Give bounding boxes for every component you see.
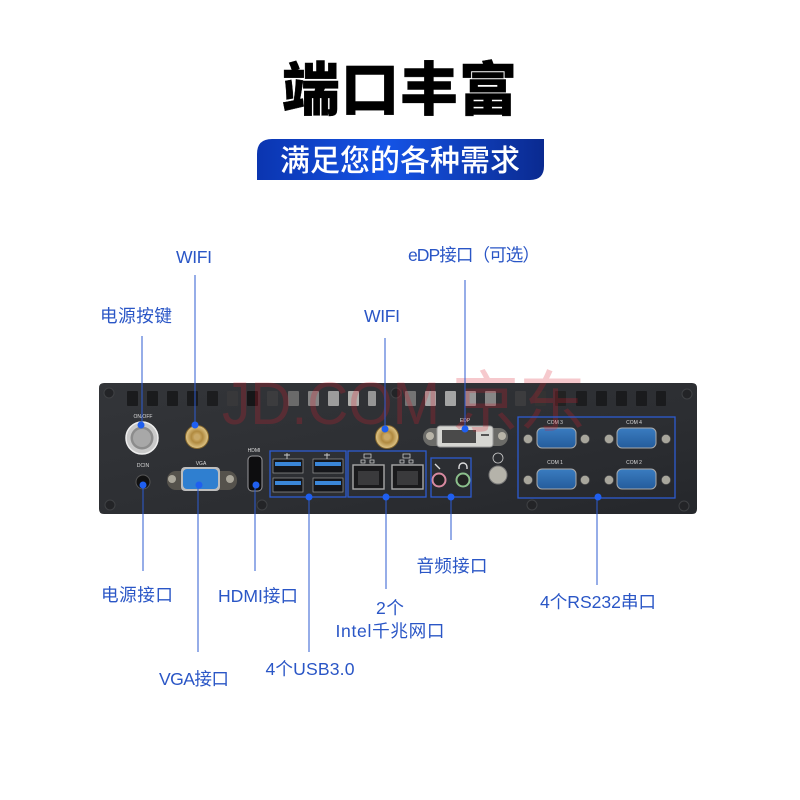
COM ports: [524, 420, 670, 489]
COM ports: COM 4: [626, 420, 642, 426]
callout: power jack: [101, 482, 173, 605]
callout: WIFI 1: WIFI: [176, 247, 212, 267]
callout: audio: 音频接口: [416, 556, 488, 576]
WIFI antenna connector 1: [186, 426, 208, 448]
HDMI port: HDMI: [248, 448, 260, 454]
callout: Ethernet: Intel千兆网口: [336, 621, 444, 641]
callout: HDMI: HDMI接口: [218, 586, 298, 606]
DC input jack: DCIN: [137, 463, 149, 469]
watermark: 京东: [452, 366, 586, 441]
callout: power button: [100, 306, 172, 428]
watermark: JD.COM: [222, 370, 440, 437]
callout: Ethernet: 2个: [376, 598, 404, 618]
eDP connector: EDP: [460, 418, 471, 424]
callout: eDP: [408, 245, 540, 432]
WIFI antenna connector 2: [376, 426, 398, 448]
callout: WIFI 1: [176, 247, 212, 428]
Ethernet ports: [353, 454, 423, 489]
COM ports: COM 3: [547, 420, 563, 426]
audio jacks: [432, 463, 470, 486]
heat sink fins: [127, 391, 666, 406]
callout: power jack: 电源接口: [101, 585, 173, 605]
title: 端口丰富: [282, 58, 518, 123]
corner screws: [104, 388, 692, 511]
callout: VGA: [159, 482, 229, 689]
subtitle banner: 满足您的各种需求: [280, 145, 520, 178]
COM ports: COM 1: [547, 460, 563, 466]
callout: WIFI 2: [364, 306, 400, 432]
USB 3.0 ports: [273, 453, 343, 492]
COM ports: COM 2: [626, 460, 642, 466]
callout: audio: [416, 458, 488, 576]
VGA port: VGA: [196, 461, 207, 467]
callout: USB: [266, 451, 355, 679]
callout: power button: 电源按键: [100, 306, 172, 326]
callout: VGA: VGA接口: [159, 669, 229, 689]
watermark: [222, 366, 586, 441]
ground screw: [489, 453, 507, 484]
callout: Ethernet: [336, 451, 444, 641]
callout: RS232: 4个RS232串口: [540, 592, 656, 612]
eDP connector: [423, 418, 508, 447]
power button: ON/OFF: [134, 414, 152, 420]
callout: USB: 4个USB3.0: [266, 659, 355, 679]
HDMI port: [248, 448, 262, 491]
callout: eDP: eDP接口（可选）: [408, 245, 540, 265]
device: mini PC rear panel: [99, 383, 697, 514]
power button: [126, 414, 158, 454]
callout: HDMI: [218, 482, 298, 606]
callout: RS232: [518, 417, 675, 612]
VGA port: [167, 461, 237, 491]
DC input jack: [136, 463, 150, 489]
subtitle banner: [257, 139, 544, 180]
callout: WIFI 2: WIFI: [364, 306, 400, 326]
